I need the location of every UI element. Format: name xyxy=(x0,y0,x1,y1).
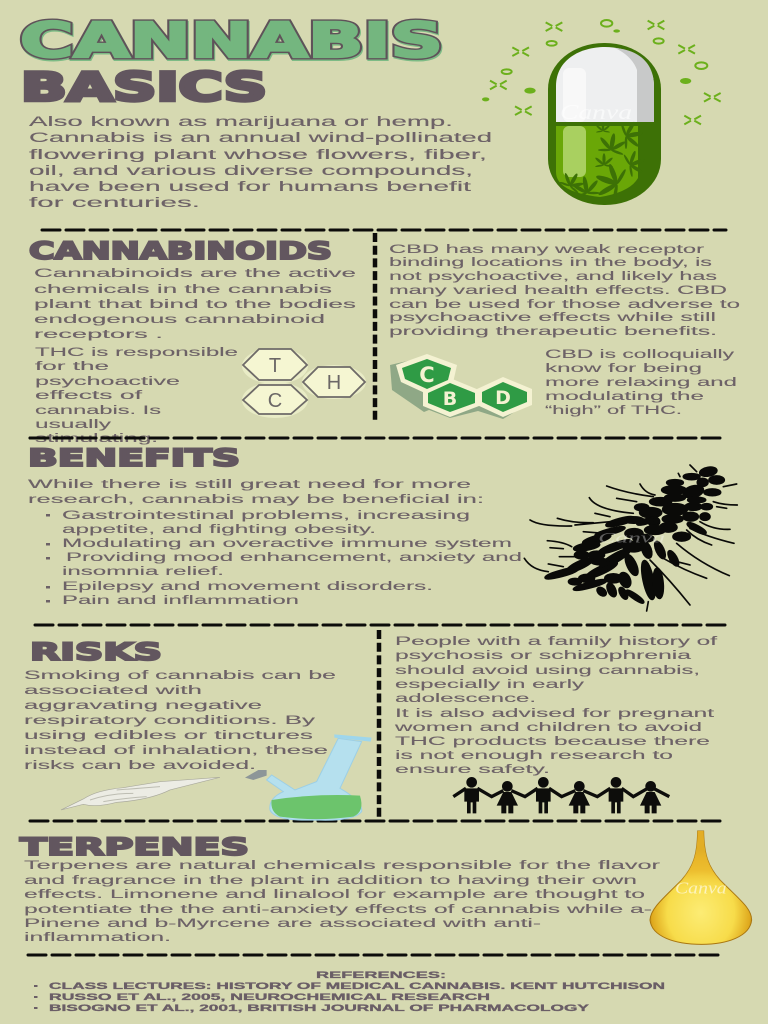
text: CBD effects: know for being xyxy=(545,361,702,375)
text: risks for vulnerable groups: It is also advised for pregnant xyxy=(395,706,715,720)
text: risks for vulnerable groups: THC products because there xyxy=(395,734,710,748)
list: benefits: Epilepsy and movement disorders. xyxy=(62,579,433,593)
text: terpenes description xyxy=(24,858,660,944)
text: cannabinoids description: Cannabinoids are the active xyxy=(34,266,356,280)
title: Cannabis: CANNABIS xyxy=(20,13,443,69)
text: CBD description: not psychoactive, and likely has xyxy=(389,269,717,283)
text: cannabinoids description: receptors . xyxy=(34,327,163,341)
text: cannabinoids description: endogenous cannabinoid xyxy=(34,312,325,326)
intro text xyxy=(29,114,492,210)
text: cannabinoids description: chemicals in the cannabis xyxy=(34,282,332,296)
list: benefits: appetite, and fighting obesity. xyxy=(62,522,376,536)
text: CBD description: many varied health effects. CBD xyxy=(389,283,727,297)
text: risks for vulnerable groups xyxy=(393,634,718,776)
intro text: oil, and various diverse compounds, xyxy=(29,163,473,178)
text: CBD description: psychoactive effects while still xyxy=(389,310,716,324)
title: Basics: BASICS xyxy=(21,66,267,110)
list: benefits xyxy=(46,508,522,607)
icon: cannabis bud: Canva xyxy=(598,531,665,547)
intro text: Cannabis is an annual wind-pollinated xyxy=(29,130,492,145)
intro text: flowering plant whose flowers, fiber, xyxy=(29,147,487,162)
list: benefits: Gastrointestinal problems, increasing xyxy=(62,508,470,522)
list: benefits: Modulating an overactive immune system xyxy=(62,536,512,550)
references xyxy=(34,970,665,1013)
text: CBD description xyxy=(389,242,740,338)
references: BISOGNO ET AL., 2001, BRITISH JOURNAL OF PHARMACOLOGY xyxy=(49,1003,589,1013)
icon: THC hexagons: T xyxy=(269,355,281,377)
icon: CBD hexagons: B xyxy=(443,388,457,410)
icon: sparkle decorations xyxy=(482,20,721,124)
text: risks for vulnerable groups: People with a family history of xyxy=(395,634,718,648)
references: CLASS LECTURES: HISTORY OF MEDICAL CANNABIS. KENT HUTCHISON xyxy=(49,981,665,991)
text: risks for vulnerable groups: psychosis or schizophrenia xyxy=(395,648,691,662)
text: CBD effects xyxy=(545,347,737,417)
icon: CBD hexagons xyxy=(390,354,532,419)
icon: cannabis bud xyxy=(524,465,737,611)
references: RUSSO ET AL., 2005, NEUROCHEMICAL RESEARCH xyxy=(49,992,490,1002)
intro text: for centuries. xyxy=(29,195,200,210)
text: risks for vulnerable groups: especially in early xyxy=(395,677,586,691)
text: risks of smoking: using edibles or tinctures xyxy=(24,728,313,742)
text: terpenes description: Pinene and b-Myrcene are associated with anti- xyxy=(24,916,541,930)
text: risks of smoking: Smoking of cannabis can be xyxy=(24,668,336,682)
text: risks for vulnerable groups: is not enough research to xyxy=(395,748,673,762)
text: cannabinoids description xyxy=(34,266,356,341)
text: risks for vulnerable groups: should avoid using cannabis, xyxy=(395,663,700,677)
divider lines xyxy=(28,230,726,955)
text: risks of smoking: respiratory conditions. By xyxy=(24,713,317,727)
heading: Benefits: BENEFITS xyxy=(28,444,240,472)
title: Cannabis xyxy=(20,13,444,70)
text: risks of smoking: aggravating negative xyxy=(24,698,262,712)
text: risks for vulnerable groups: ensure safety. xyxy=(395,762,550,776)
icon: THC hexagons: C xyxy=(268,390,282,412)
text: terpenes description: potentiate the the anti-anxiety effects of cannabis while a- xyxy=(24,902,652,916)
text: CBD description: can be used for those adverse to xyxy=(389,297,740,311)
icon: joint xyxy=(61,777,220,810)
text: THC description xyxy=(35,345,238,445)
icon: capsule with cannabis leaves: Canva xyxy=(560,100,632,124)
text: CBD effects: modulating the xyxy=(545,389,704,403)
text: CBD effects: CBD is colloquially xyxy=(545,347,736,361)
text: THC description: usually xyxy=(35,417,113,431)
icon: capsule with cannabis leaves xyxy=(548,43,661,205)
text: benefits intro: research, cannabis may be beneficial in: xyxy=(28,492,484,506)
text: CBD effects: more relaxing and xyxy=(545,375,737,389)
text: THC description: effects of xyxy=(35,388,143,402)
text: risks of smoking: instead of inhalation, these xyxy=(24,743,328,757)
icon: family holding hands xyxy=(453,777,669,813)
list: benefits: Providing mood enhancement, anxiety and xyxy=(66,550,522,564)
heading: Terpenes: TERPENES xyxy=(20,833,249,861)
text: terpenes description: effects. Limonene and linalool for example are thought to xyxy=(24,887,645,901)
text: risks of smoking xyxy=(24,668,336,772)
text: risks for vulnerable groups: women and children to avoid xyxy=(393,720,702,734)
icon: THC hexagons: H xyxy=(327,372,341,394)
icon: THC hexagons xyxy=(242,348,366,418)
text: terpenes description: and fragrance in the plant in addition to having their own xyxy=(24,873,637,887)
list: benefits: insomnia relief. xyxy=(62,564,224,578)
text: benefits intro: While there is still great need for more xyxy=(28,477,471,491)
text: terpenes description: Terpenes are natural chemicals responsible for the flavor xyxy=(24,858,660,872)
text: CBD effects: “high” of THC. xyxy=(545,403,682,417)
text: THC description: stimulating. xyxy=(35,431,158,445)
text: THC description: psychoactive xyxy=(35,374,180,388)
text: CBD description: binding locations in the body, is xyxy=(389,255,712,269)
intro text: Also known as marijuana or hemp. xyxy=(29,114,453,129)
title: Cannabis: CANNABIS xyxy=(21,14,444,70)
icon: glass bong xyxy=(245,734,372,820)
text: risks for vulnerable groups: adolescence. xyxy=(395,691,536,705)
icon: oil drop xyxy=(650,831,752,944)
title: Cannabis: CANNABIS xyxy=(20,13,443,69)
text: CBD description: CBD has many weak receptor xyxy=(389,242,704,256)
text: terpenes description: inflammation. xyxy=(24,930,171,944)
intro text: have been used for humans benefit xyxy=(29,179,472,194)
list: benefits: Pain and inflammation xyxy=(62,593,299,607)
icon: CBD hexagons: D xyxy=(495,387,511,409)
icon: oil drop: Canva xyxy=(675,878,727,897)
text: THC description: cannabis. Is xyxy=(35,403,161,417)
references: REFERENCES: xyxy=(316,970,446,981)
heading: Risks: RISKS xyxy=(30,638,162,666)
text: risks of smoking: associated with xyxy=(24,683,202,697)
text: CBD description: providing therapeutic benefits. xyxy=(389,324,717,338)
text: benefits intro xyxy=(28,477,484,506)
icon: CBD hexagons: C xyxy=(419,363,435,387)
text: risks of smoking: risks can be avoided. xyxy=(24,758,256,772)
text: THC description: for the xyxy=(35,359,109,373)
heading: Cannabinoids: CANNABINOIDS xyxy=(29,237,332,265)
text: cannabinoids description: plant that bind to the bodies xyxy=(34,297,356,311)
text: THC description: THC is responsible xyxy=(35,345,238,359)
